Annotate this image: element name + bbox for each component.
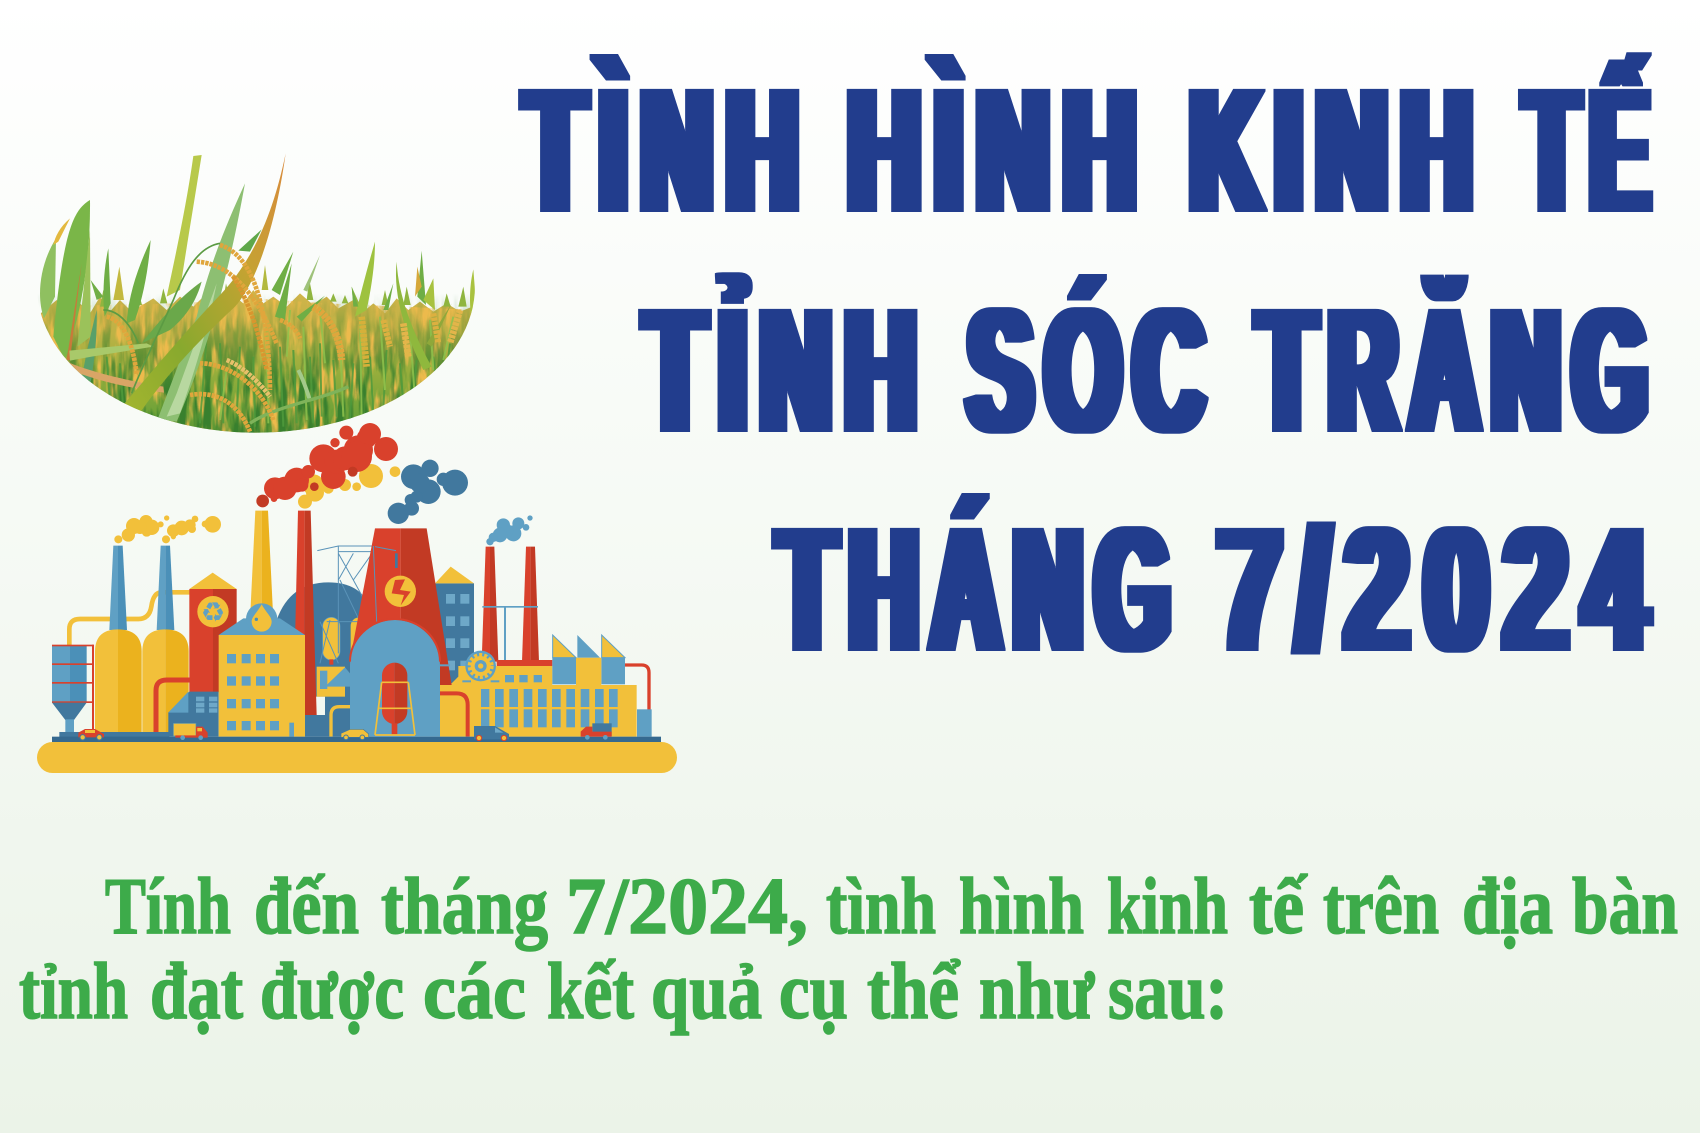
intro line 1 <box>105 863 1678 951</box>
intro line 1: đến <box>254 863 359 951</box>
icon: oil drop <box>252 604 272 632</box>
intro line 2: được <box>260 948 404 1036</box>
intro line 1: tình <box>826 863 936 951</box>
intro line 1: 7/2024, <box>566 863 808 951</box>
intro line 2: thể <box>867 948 961 1036</box>
road step <box>59 732 169 737</box>
blue smoke <box>388 460 468 524</box>
tall yellow-green blade <box>167 155 202 297</box>
yellow truck on the road <box>173 723 208 740</box>
title line 2: TỈNH <box>645 272 930 469</box>
title <box>525 52 1663 688</box>
intro line 1: tế <box>1249 863 1308 951</box>
title line 2: SÓC <box>968 273 1217 469</box>
darker red puffs <box>256 467 358 507</box>
red pipe on hall <box>440 693 468 737</box>
intro line 2: như <box>979 948 1095 1036</box>
intro line 2: sau: <box>1108 948 1228 1036</box>
dome behind <box>277 582 370 697</box>
yellow silos <box>95 629 189 732</box>
title line 1: HÌNH <box>848 53 1150 249</box>
illustration: factory complex <box>37 423 677 773</box>
pipe yellow <box>69 592 190 647</box>
intro line 2 <box>19 948 1228 1036</box>
right half of factory <box>52 460 661 742</box>
yellow main building <box>219 603 305 737</box>
curved orange-tipped leaf <box>124 153 286 412</box>
yellow tall chimney <box>250 511 262 620</box>
small green leaves <box>238 229 262 252</box>
title line 1: TÌNH <box>525 53 812 249</box>
vertical green stems <box>107 310 453 427</box>
yellow curved pipe <box>331 707 352 737</box>
red tower with recycle badge <box>189 573 237 692</box>
left foreground leaves <box>40 200 164 393</box>
road <box>52 737 661 742</box>
red pipe <box>156 680 190 732</box>
thin stems <box>103 243 348 423</box>
vehicles on road <box>78 723 612 741</box>
power station cone <box>350 528 452 685</box>
intro line 1: bàn <box>1572 863 1678 951</box>
intro line 2: đạt <box>150 948 243 1036</box>
icon: recycling arrows: ♻ <box>201 597 225 628</box>
red tall chimney <box>293 511 305 715</box>
intro paragraph <box>19 863 1678 1036</box>
yellow storage block and tanks <box>317 617 368 697</box>
background leaves <box>91 240 476 370</box>
arching leaf <box>142 282 202 343</box>
red and yellow smoke plume <box>256 423 400 509</box>
yellow estate car <box>341 729 369 740</box>
icon: lightning badge <box>385 576 416 607</box>
red delivery truck <box>581 723 612 740</box>
intro line 1: tháng <box>381 863 548 951</box>
red car on the left road <box>78 729 104 740</box>
blue apartment block <box>435 567 474 683</box>
rice field mass <box>37 290 477 437</box>
blue base beside main building <box>305 687 370 737</box>
green streak texture <box>37 293 477 437</box>
blue van <box>474 726 509 741</box>
gear badge <box>465 651 496 681</box>
transmission pylon <box>317 546 398 663</box>
red capsule tank <box>382 663 395 724</box>
red chimney pair <box>482 547 539 662</box>
title line 1 <box>525 52 1661 249</box>
light blue smoke <box>486 515 533 545</box>
intro line 1: trên <box>1323 863 1439 951</box>
hopper <box>52 645 94 733</box>
blue arch building <box>350 619 450 737</box>
intro line 2: các <box>423 948 526 1036</box>
title line 3: THÁNG <box>778 492 1183 688</box>
intro line 2: quả <box>651 948 762 1036</box>
intro line 1: Tính <box>105 863 231 951</box>
title line 2 <box>645 272 1660 469</box>
intro line 2: kết <box>547 948 634 1036</box>
intro line 1: địa <box>1462 863 1553 951</box>
yellow puffs <box>298 464 400 509</box>
jagged leaf tips along the crop line <box>100 284 467 307</box>
lighter stripe on central blade <box>167 283 217 417</box>
blue chimneys <box>109 546 174 630</box>
low blue building <box>168 692 219 737</box>
factory hall <box>440 635 652 737</box>
red puffs <box>264 423 398 502</box>
intro line 1: kinh <box>1107 863 1228 951</box>
intro line 2: cụ <box>779 948 848 1036</box>
intro line 1: hình <box>959 863 1084 951</box>
yellow smoke over blue chimneys <box>114 515 221 543</box>
yellow platform <box>37 742 677 773</box>
golden rice panicles <box>107 245 460 432</box>
intro line 2: tỉnh <box>19 948 128 1036</box>
central pale green blade <box>157 183 245 422</box>
illustration: rice field in an oval <box>37 153 477 437</box>
left half of factory <box>52 511 370 737</box>
gold streak texture <box>37 298 477 437</box>
